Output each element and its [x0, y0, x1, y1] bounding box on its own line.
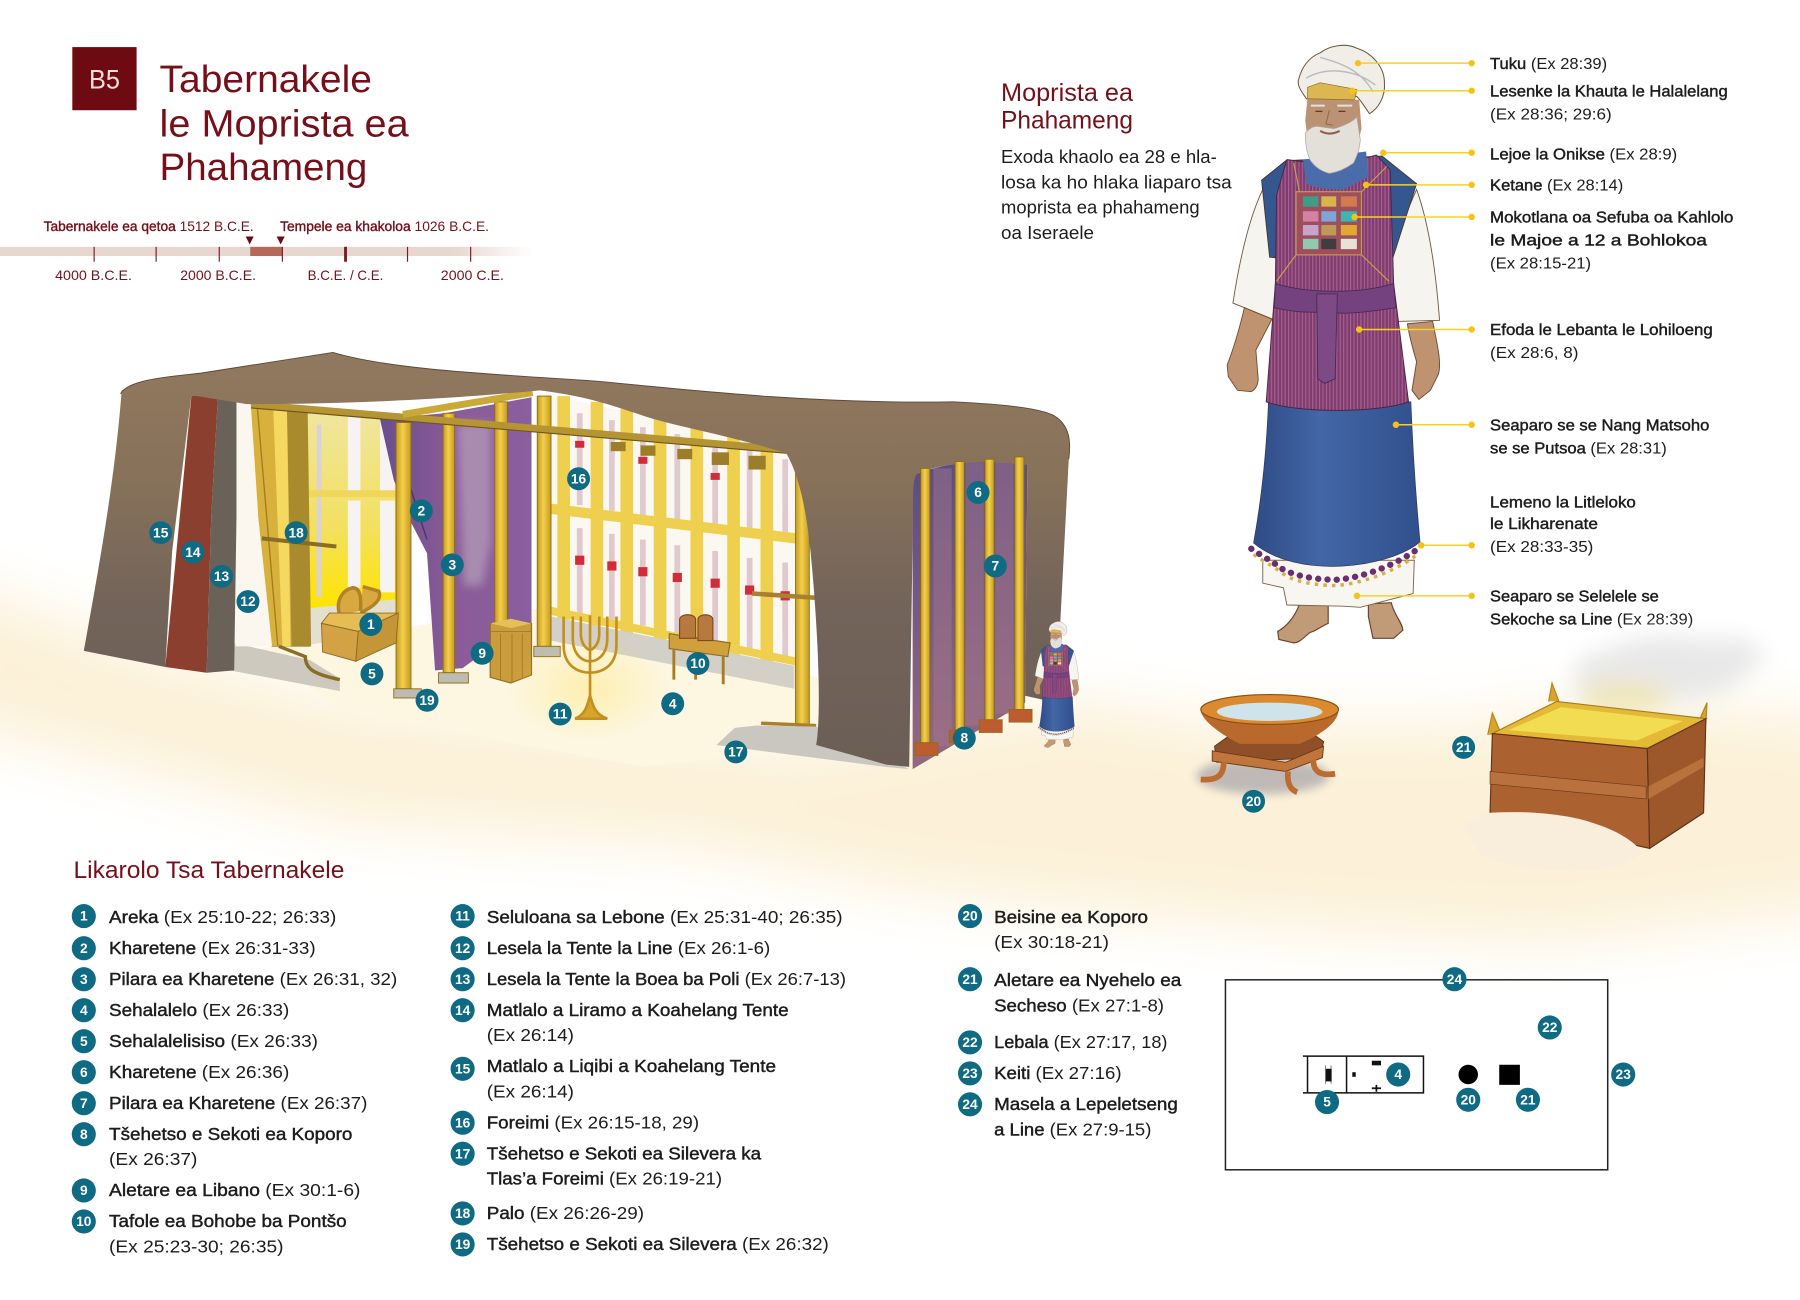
badge: B5: B5	[89, 64, 120, 94]
heading: parts of the tabernacle: Likarolo Tsa Tabernakele	[73, 857, 344, 884]
callout lines	[1349, 60, 1475, 599]
back wall: holy place	[540, 393, 806, 689]
back wall: most holy	[307, 411, 404, 645]
heading: Moprista ea Phahameng: Phahameng	[1001, 107, 1133, 135]
list column 2: 15	[455, 1061, 471, 1076]
tabernacle numbers: 10	[690, 656, 706, 671]
veil curtain	[380, 397, 532, 670]
priest garment labels: (Ex 28:33-35)	[1490, 538, 1593, 556]
priest garment labels: (Ex 28:15-21)	[1490, 255, 1591, 273]
collar	[1303, 152, 1368, 189]
illustration: tabernacle	[84, 352, 1070, 769]
timeline: Tabernakele ea qetoa 1512 B.C.E.	[44, 219, 254, 234]
list column 2: Seluloana sa Lebone (Ex 25:31-40; 26:35)	[487, 907, 843, 927]
breastplate	[1296, 192, 1361, 255]
timeline	[0, 219, 533, 283]
priest garment labels	[1490, 55, 1733, 629]
tabernacle floor	[258, 608, 829, 767]
priest garment labels: Lemeno la Litleloko	[1490, 493, 1636, 511]
numbers on altar and basin	[1242, 736, 1475, 813]
list column 1: Kharetene (Ex 26:36)	[109, 1062, 289, 1082]
list column 2: (Ex 26:14)	[487, 1025, 574, 1045]
list column 2: Lesela la Tente la Line (Ex 26:1-6)	[487, 938, 770, 958]
list column 1: 9	[80, 1183, 88, 1198]
list column 1: Kharetene (Ex 26:31-33)	[109, 938, 316, 958]
title	[160, 59, 410, 189]
basin of copper	[1196, 695, 1339, 794]
list column 1: Areka (Ex 25:10-22; 26:33)	[109, 907, 336, 927]
list column 2: 18	[455, 1206, 471, 1221]
right sleeve and arm	[1384, 189, 1440, 321]
heading: Moprista ea Phahameng	[1001, 79, 1134, 135]
list column 3: 23	[962, 1066, 978, 1081]
priest garment labels: Tuku (Ex 28:39)	[1490, 55, 1607, 73]
timeline: B.C.E. / C.E.	[308, 268, 383, 283]
list column 2: Matlalo a Liramo a Koahelang Tente	[487, 1000, 789, 1020]
left sleeve and arm	[1233, 189, 1277, 320]
ephod	[1266, 155, 1409, 410]
pillars	[394, 396, 560, 698]
priest garment labels: se se Putsoa (Ex 28:31)	[1490, 439, 1667, 457]
list column 3	[958, 904, 1182, 1139]
loops on beam	[611, 442, 766, 470]
list column 2: 12	[455, 941, 471, 956]
courtyard plan: 4	[1394, 1067, 1402, 1082]
coverings on the left	[84, 390, 272, 673]
courtyard plan	[1225, 967, 1635, 1170]
tabernacle numbers: 5	[368, 666, 376, 681]
tabernacle numbers: 19	[419, 693, 435, 708]
list column 1: Aletare ea Libano (Ex 30:1-6)	[109, 1180, 360, 1200]
chains and shoulder stones	[1277, 163, 1389, 281]
altar of burnt offering	[1461, 683, 1707, 871]
title: le Moprista ea	[160, 104, 410, 146]
courtyard plan: 21	[1520, 1092, 1536, 1107]
tabernacle numbers: 8	[960, 731, 968, 746]
numbers on altar and basin: 20	[1246, 794, 1262, 809]
numbers on altar and basin: 21	[1456, 740, 1472, 755]
list column 3: Keiti (Ex 27:16)	[994, 1063, 1122, 1083]
priest garment labels: Efoda le Lebanta le Lohiloeng	[1490, 321, 1713, 339]
ash mound	[1461, 812, 1643, 871]
tabernacle numbers: 1	[367, 617, 375, 632]
tabernacle numbers: 14	[185, 545, 201, 560]
timeline: 2000 C.E.	[441, 268, 504, 283]
list column 1: 1	[80, 909, 88, 924]
altar of incense	[490, 619, 532, 683]
list column 1: (Ex 25:23-30; 26:35)	[109, 1236, 284, 1256]
list column 1: 7	[80, 1096, 88, 1111]
timeline: Tempele ea khakoloa 1026 B.C.E.	[280, 219, 489, 234]
high priest figure	[1227, 45, 1440, 643]
list column 2: 17	[455, 1146, 471, 1161]
heading: Moprista ea Phahameng: Moprista ea	[1001, 79, 1134, 107]
beams	[247, 393, 789, 453]
list column 1: (Ex 26:37)	[109, 1149, 197, 1169]
timeline: 2000 B.C.E.	[180, 268, 256, 283]
tabernacle numbers: 2	[417, 503, 425, 518]
list column 2: 19	[455, 1237, 471, 1252]
list column 1: Tšehetso e Sekoti ea Koporo	[109, 1124, 352, 1144]
list column 3: Secheso (Ex 27:1-8)	[994, 995, 1164, 1015]
holy crown band	[1308, 83, 1357, 100]
priest garment labels: Seaparo se se Nang Matsoho	[1490, 417, 1709, 435]
list column 2: (Ex 26:14)	[487, 1081, 574, 1101]
list column 3: Masela a Lepeletseng	[994, 1094, 1178, 1114]
list column 1: 5	[80, 1034, 88, 1049]
beard	[1305, 117, 1360, 173]
intro paragraph	[1001, 146, 1233, 243]
priest garment labels: (Ex 28:6, 8)	[1490, 344, 1578, 362]
priest garment labels: le Majoe a 12 a Bohlokoa	[1490, 232, 1707, 250]
list column 2: 14	[455, 1003, 471, 1018]
tabernacle numbers: 3	[448, 557, 456, 572]
list column 2: Foreimi (Ex 26:15-18, 29)	[487, 1112, 699, 1132]
blue robe	[1254, 402, 1420, 566]
sand background	[0, 574, 1800, 944]
list column 1: Sehalalelo (Ex 26:33)	[109, 1000, 289, 1020]
rear pillars	[915, 457, 1032, 755]
title: Tabernakele	[160, 59, 372, 101]
tabernacle numbers: 4	[669, 696, 677, 711]
list column 2: Lesela la Tente la Boea ba Poli (Ex 26:7-13)	[487, 969, 846, 989]
intro paragraph: losa ka ho hlaka liaparo tsa	[1001, 171, 1233, 192]
tabernacle numbers: 7	[991, 559, 999, 574]
left wall boards	[247, 403, 311, 646]
list column 3: (Ex 30:18-21)	[994, 932, 1109, 952]
list column 2: Tšehetso e Sekoti ea Silevera (Ex 26:32)	[487, 1234, 829, 1254]
list column 2: 16	[455, 1115, 471, 1130]
list column 1: Pilara ea Kharetene (Ex 26:37)	[109, 1093, 367, 1113]
intro paragraph: oa Iseraele	[1001, 222, 1094, 243]
lampstand	[564, 615, 616, 719]
under robe	[1263, 560, 1414, 607]
priest garment labels: Sekoche sa Line (Ex 28:39)	[1490, 611, 1693, 629]
list column 1: 6	[80, 1065, 88, 1080]
list column 3: Lebala (Ex 27:17, 18)	[994, 1032, 1167, 1052]
rear entrance curtain	[913, 461, 1027, 769]
tabernacle numbers: 12	[240, 594, 256, 609]
bar	[262, 538, 336, 546]
tabernacle numbers: 13	[214, 569, 230, 584]
list column 1: 8	[80, 1127, 88, 1142]
floor glow	[509, 637, 669, 740]
list column 3: Beisine ea Koporo	[994, 907, 1148, 927]
tabernacle numbers: 6	[974, 485, 982, 500]
priest garment labels: Seaparo se Selelele se	[1490, 588, 1659, 606]
tent cover	[121, 352, 1070, 767]
priest garment labels: (Ex 28:36; 29:6)	[1490, 105, 1612, 123]
list column 1: Sehalalelisiso (Ex 26:33)	[109, 1031, 318, 1051]
embroidered cherubs	[580, 413, 785, 660]
priest garment labels: le Likharenate	[1490, 515, 1598, 533]
list column 2: 11	[455, 909, 470, 924]
courtyard plan: 22	[1542, 1020, 1558, 1035]
tabernacle numbers: 11	[553, 707, 568, 722]
silver sockets	[218, 643, 909, 769]
small priest figure	[1034, 621, 1079, 748]
list column 3: Aletare ea Nyehelo ea	[994, 970, 1182, 990]
smoke	[1574, 636, 1762, 714]
list column 2: Matlalo a Liqibi a Koahelang Tente	[487, 1056, 776, 1076]
tabernacle numbers	[149, 467, 1007, 763]
list column 3: 21	[962, 972, 978, 987]
list column 1: 3	[80, 972, 88, 987]
tabernacle numbers: 17	[728, 745, 744, 760]
list column 2: 13	[455, 972, 471, 987]
list column 1: 2	[80, 941, 88, 956]
courtyard plan: 23	[1616, 1067, 1631, 1082]
list column 1: 4	[80, 1003, 88, 1018]
list column 2: Tšehetso e Sekoti ea Silevera ka	[487, 1143, 762, 1163]
ark of the covenant	[321, 587, 398, 661]
tabernacle numbers: 15	[153, 525, 169, 540]
intro paragraph: moprista ea phahameng	[1001, 197, 1200, 218]
hem with pomegranates and bells	[1251, 546, 1421, 585]
list column 2: Tlas’a Foreimi (Ex 26:19-21)	[487, 1169, 722, 1189]
courtyard plan: 5	[1323, 1095, 1331, 1110]
sash	[1274, 284, 1396, 383]
courtyard plan: 24	[1447, 972, 1462, 987]
list column 1: 10	[76, 1214, 92, 1229]
tabernacle numbers: 9	[478, 646, 486, 661]
table of showbread	[669, 615, 730, 684]
tabernacle numbers: 16	[571, 471, 587, 486]
list column 1	[72, 904, 397, 1256]
face	[1305, 98, 1361, 147]
timeline: 4000 B.C.E.	[55, 268, 132, 283]
turban	[1298, 45, 1385, 114]
priest garment labels: Mokotlana oa Sefuba oa Kahlolo	[1490, 209, 1733, 227]
list column 3: 22	[962, 1035, 978, 1050]
priest garment labels: Ketane (Ex 28:14)	[1490, 177, 1623, 195]
list column 2	[451, 904, 846, 1256]
priest garment labels: Lesenke la Khauta le Halalelang	[1490, 82, 1728, 100]
list column 3: 24	[962, 1097, 978, 1112]
badge: B5	[72, 47, 137, 110]
right pole and bar	[752, 450, 821, 726]
priest garment labels: Lejoe la Onikse (Ex 28:9)	[1490, 146, 1677, 164]
blue shoulders	[1262, 156, 1417, 270]
list column 2: Palo (Ex 26:26-29)	[487, 1203, 644, 1223]
list column 1: Tafole ea Bohobe ba Pontšo	[109, 1211, 347, 1231]
courtyard plan: 20	[1461, 1092, 1476, 1107]
intro paragraph: Exoda khaolo ea 28 e hla-	[1001, 146, 1217, 167]
title: Phahameng	[160, 147, 367, 189]
list column 1: Pilara ea Kharetene (Ex 26:31, 32)	[109, 969, 397, 989]
tabernacle numbers: 18	[289, 525, 304, 540]
feet	[1278, 603, 1403, 643]
list column 3: a Line (Ex 27:9-15)	[994, 1119, 1151, 1139]
list column 3: 20	[962, 909, 978, 924]
